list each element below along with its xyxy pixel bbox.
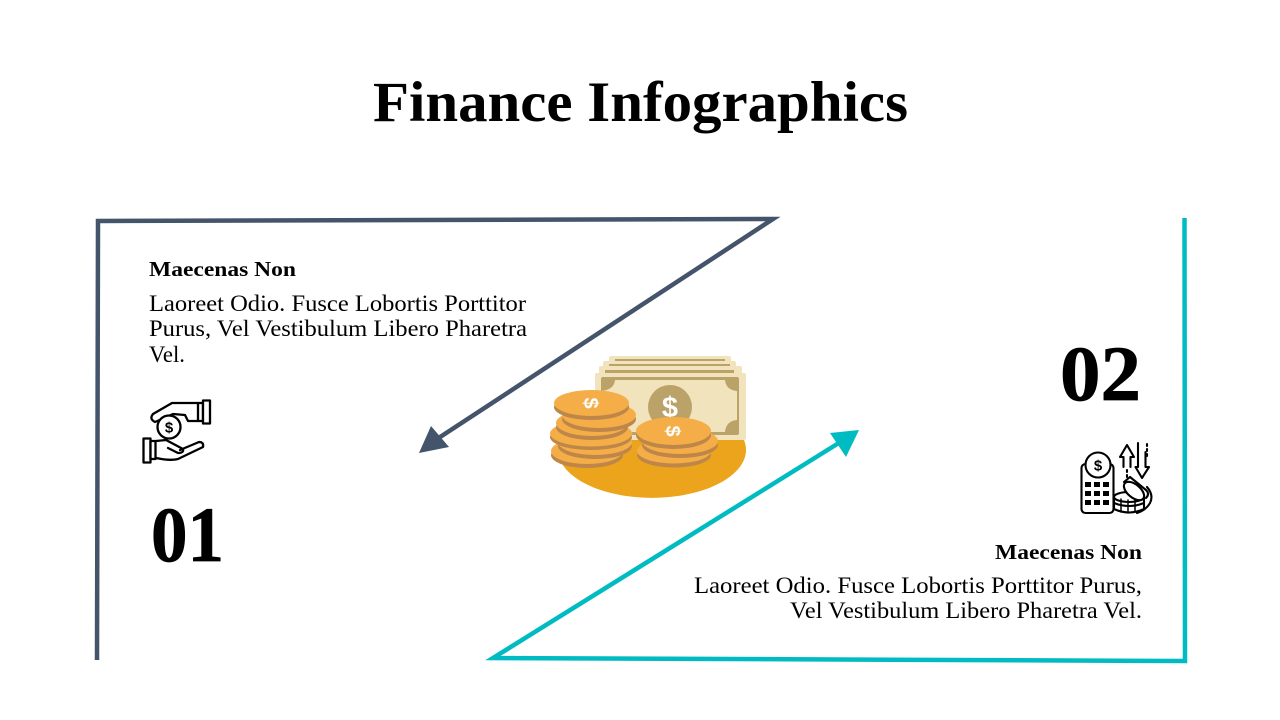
- arrow: teal frame pointing to centre: [493, 218, 1185, 661]
- text block: section 01: [149, 257, 527, 367]
- coin stack: right: $: [661, 425, 683, 437]
- title: Finance Infographics: [373, 71, 908, 134]
- illustration: money and coins: [550, 356, 746, 498]
- text block: section 01: Laoreet Odio. Fusce Lobortis Porttitor: [149, 291, 526, 316]
- icon: calculator, coins and arrows: $: [1094, 458, 1103, 474]
- icon: hands with coin: [144, 400, 210, 462]
- number 01: 01: [151, 491, 224, 578]
- arrow: navy frame pointing to centre: [97, 219, 773, 660]
- icon: calculator, coins and arrows: [1082, 443, 1151, 513]
- text block: section 01: Vel.: [149, 342, 185, 367]
- number 02: 02: [1060, 330, 1141, 417]
- text block: section 01: Maecenas Non: [149, 257, 296, 281]
- icon: hands with coin: $: [165, 420, 174, 436]
- banknote stack: $: [662, 392, 678, 424]
- text block: section 02: Vel Vestibulum Libero Pharetra Vel.: [790, 598, 1142, 623]
- banknote stack: [595, 356, 746, 440]
- text block: section 02: Maecenas Non: [995, 540, 1142, 564]
- coin stack: left: $: [579, 397, 601, 409]
- coin stack: right: [636, 417, 718, 468]
- text block: section 02: Laoreet Odio. Fusce Lobortis Porttitor Purus,: [694, 573, 1142, 598]
- orange base: [558, 440, 746, 498]
- text block: section 02: [694, 540, 1142, 623]
- text block: section 01: Purus, Vel Vestibulum Libero Pharetra: [149, 316, 527, 341]
- coin stack: left: [550, 390, 636, 468]
